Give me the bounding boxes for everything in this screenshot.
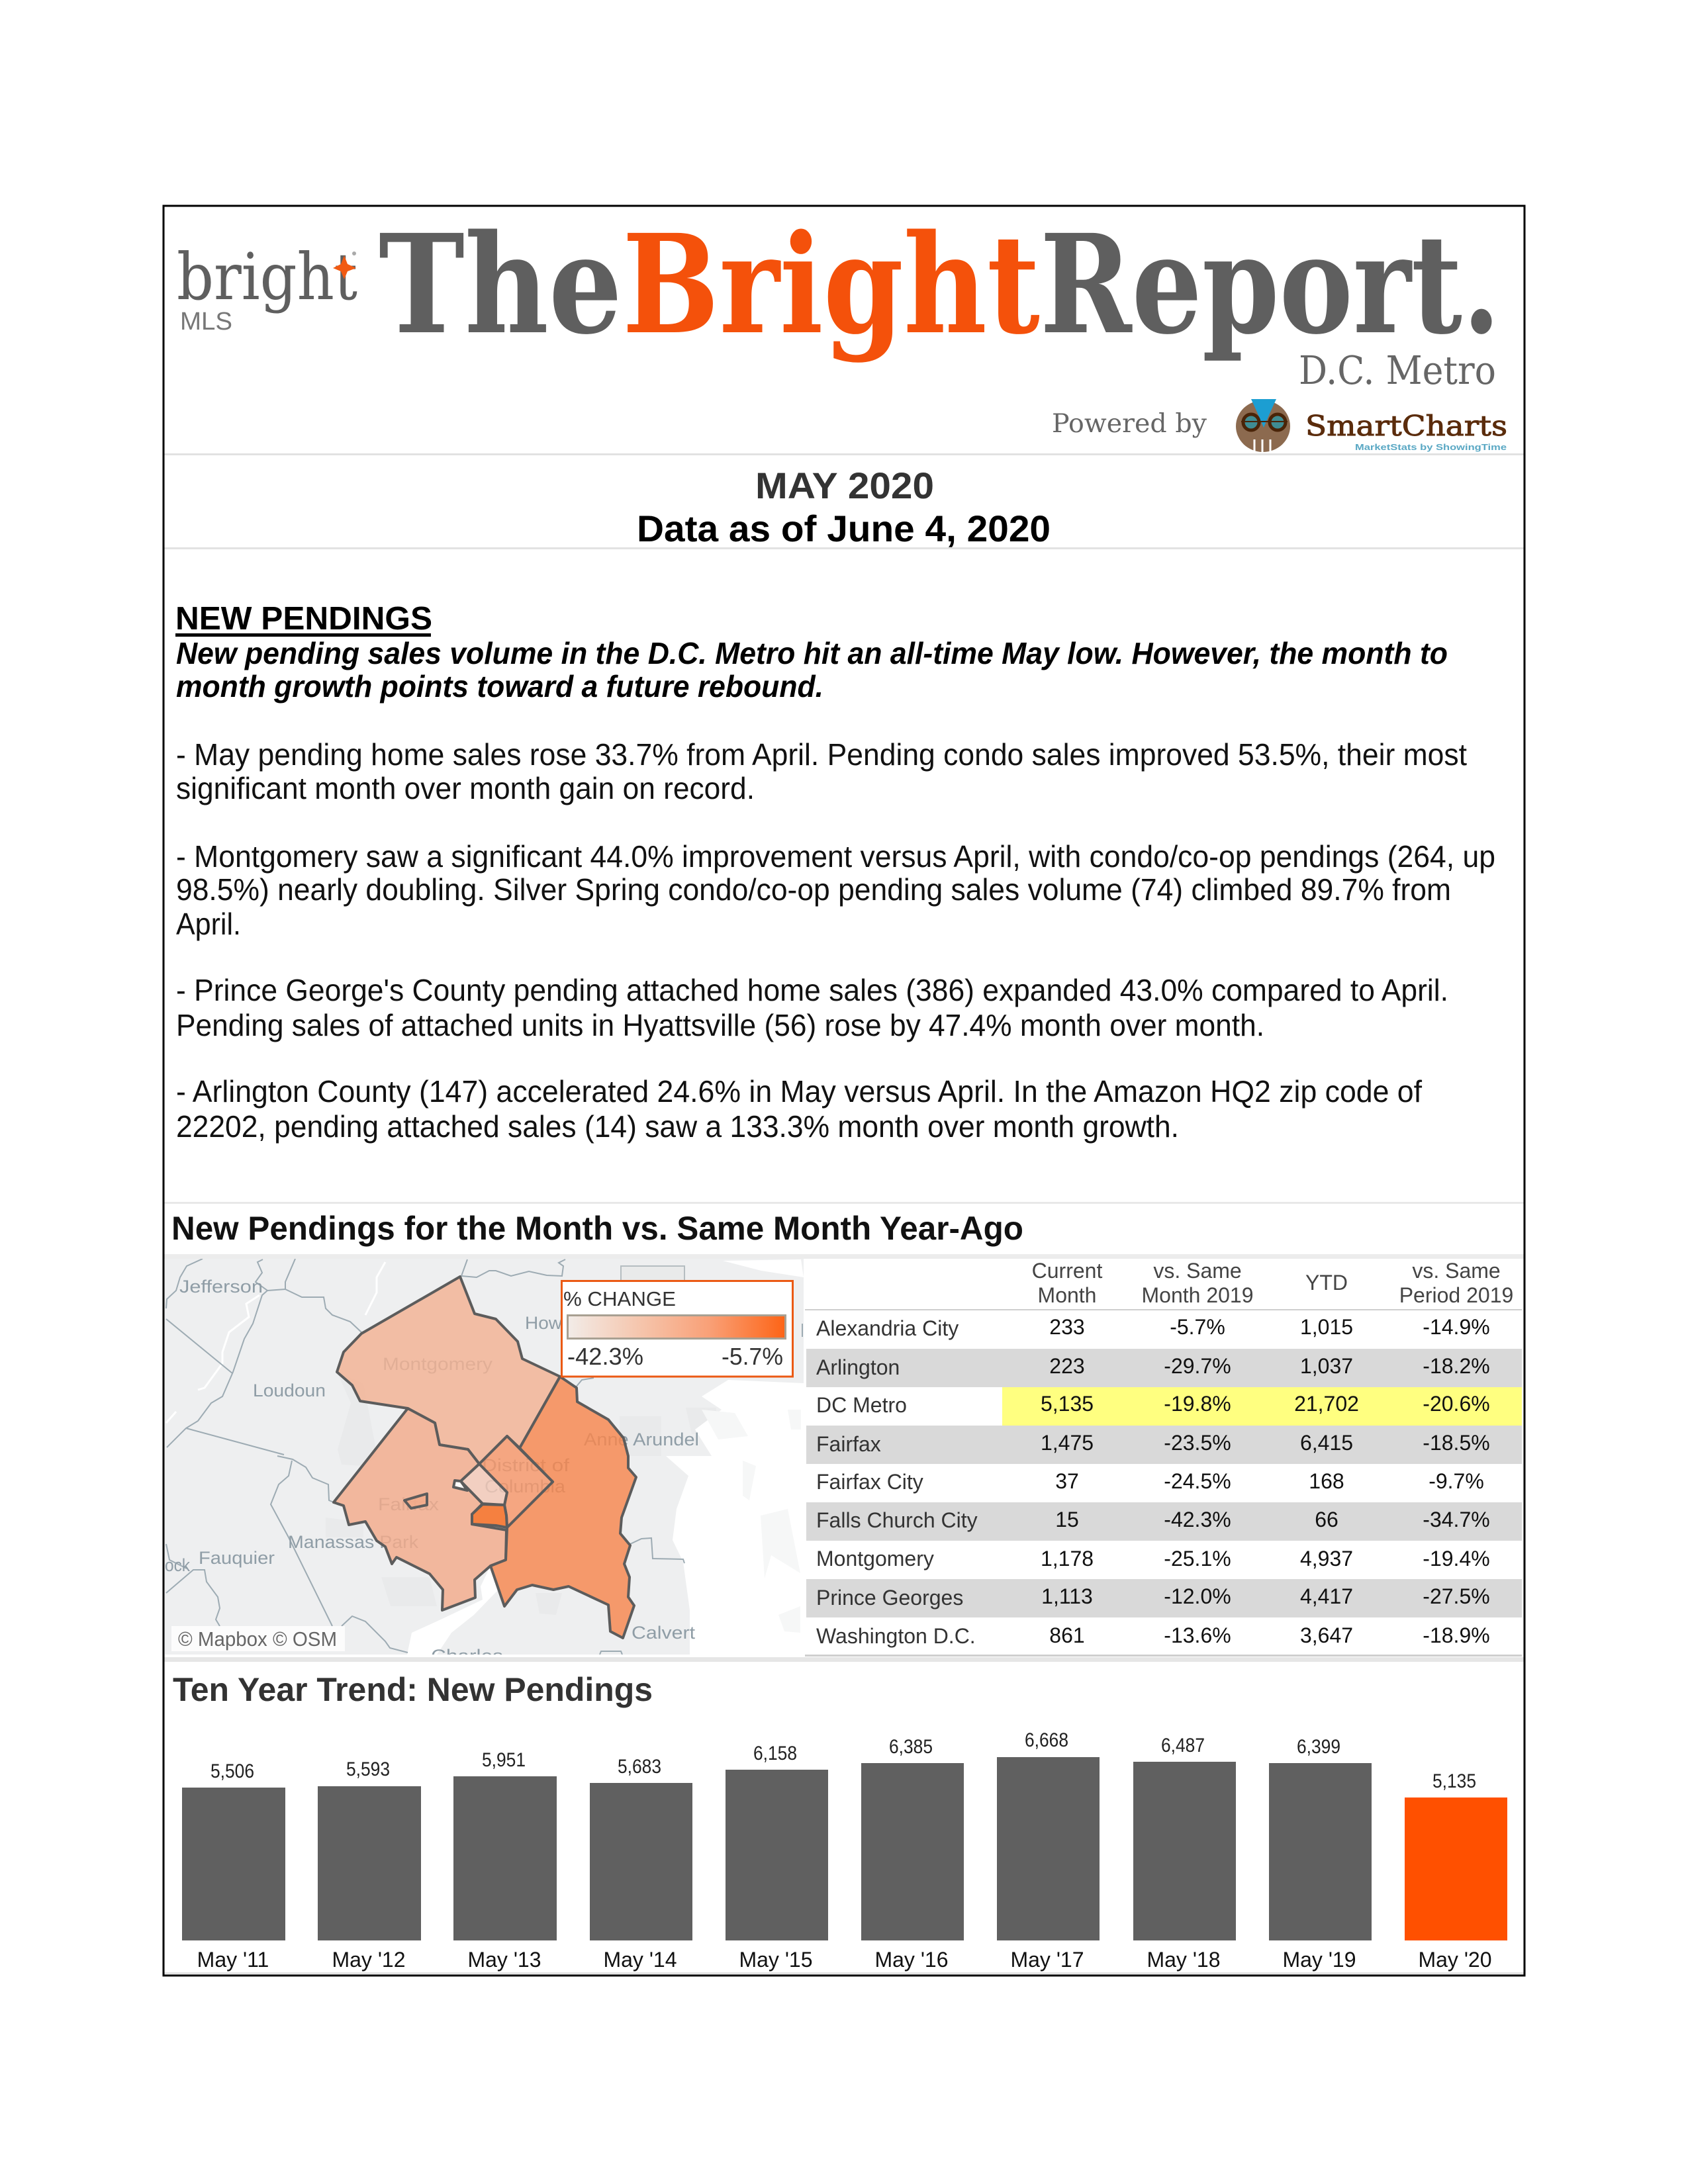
bar May 2015: May '15 <box>739 1948 813 1972</box>
map place labels: ock <box>165 1555 190 1575</box>
map place labels: Calvert <box>632 1623 696 1643</box>
bar chart: ten year trend <box>182 1729 1507 1972</box>
row: Arlington <box>816 1354 1490 1379</box>
text block: paragraph 3: - Prince George's County pending attached home sales (386) expanded 43.0% compared to April. <box>176 973 1448 1007</box>
row: Alexandria City <box>816 1315 1490 1340</box>
row: Fairfax City: 37 <box>1055 1469 1079 1493</box>
logo title: The Bright Report <box>379 205 1501 365</box>
text block: paragraph 4: 22202, pending attached sales (14) saw a 133.3% month over month growth. <box>176 1109 1179 1144</box>
logo: Bright MLS: bright <box>177 240 357 314</box>
table header: Current <box>1032 1259 1102 1283</box>
row: Washington D.C.: -13.6% <box>1164 1623 1231 1647</box>
row: Fairfax: 1,475 <box>1041 1431 1094 1455</box>
map place labels: Fauquier <box>199 1548 275 1568</box>
row: Prince Georges: Prince Georges <box>816 1586 963 1610</box>
row: Fairfax: -23.5% <box>1164 1431 1231 1455</box>
row: Prince Georges: -27.5% <box>1423 1584 1490 1608</box>
bar May 2015 <box>726 1743 828 1972</box>
map place labels: How <box>525 1313 563 1333</box>
row: Montgomery: 1,178 <box>1041 1547 1094 1570</box>
heading: map and table section: New Pendings for the Month vs. Same Month Year-Ago <box>171 1210 1023 1247</box>
table header: YTD <box>1305 1271 1348 1295</box>
text block: paragraph 2: 98.5%) nearly doubling. Silver Spring condo/co-op pending sales volume (74) climbed 89.7% from <box>176 872 1451 907</box>
row: Prince Georges: 1,113 <box>1041 1584 1093 1608</box>
county: Montgomery <box>337 1277 560 1464</box>
map attribution: © Mapbox © OSM <box>178 1627 337 1651</box>
county: Fairfax City <box>404 1494 427 1508</box>
row: Arlington: 1,037 <box>1300 1354 1353 1378</box>
row: Washington D.C.: 861 <box>1049 1623 1085 1647</box>
map place labels: Columbia <box>485 1477 566 1496</box>
logo title: The Bright Report: Report. <box>1040 205 1501 365</box>
text block: paragraph 3: Pending sales of attached units in Hyattsville (56) rose by 47.4% month over month. <box>176 1008 1264 1042</box>
row: Montgomery: Montgomery <box>816 1547 934 1570</box>
row: Washington D.C.: Washington D.C. <box>816 1624 976 1648</box>
county: Washington D.C. <box>479 1436 553 1527</box>
legend: percent change: % CHANGE <box>563 1287 676 1310</box>
icon: SmartCharts owl <box>1236 399 1290 453</box>
row: DC Metro <box>816 1392 1490 1417</box>
lead text: New pending sales volume in the D.C. Metro hit an all-time May low. However, the month to <box>176 636 1448 670</box>
text block: paragraph 3 <box>176 973 1448 1042</box>
row: Arlington: Arlington <box>816 1355 900 1379</box>
row: Arlington: -29.7% <box>1164 1354 1231 1378</box>
logo: Bright MLS: MLS <box>180 308 232 336</box>
text block: paragraph 1: significant month over month gain on record. <box>176 771 755 805</box>
logo title: The Bright Report: Bright <box>622 205 1040 365</box>
row: Fairfax City: Fairfax City <box>816 1470 923 1494</box>
row: Washington D.C.: -18.9% <box>1423 1623 1490 1647</box>
legend: percent change <box>561 1281 793 1377</box>
row: Fairfax City <box>816 1469 1484 1494</box>
bar May 2020: 5,135 <box>1432 1770 1476 1792</box>
row: Alexandria City: -14.9% <box>1423 1315 1490 1339</box>
bar May 2014: May '14 <box>603 1948 677 1972</box>
bar May 2018 <box>1133 1735 1236 1972</box>
bar May 2017 <box>997 1729 1100 1972</box>
row: Montgomery <box>816 1547 1490 1570</box>
map place labels: Loudoun <box>253 1381 326 1400</box>
text block: paragraph 2 <box>176 839 1495 941</box>
text block: paragraph 1 <box>176 737 1467 805</box>
bar May 2016: May '16 <box>874 1948 949 1972</box>
map place labels: District of <box>482 1455 570 1475</box>
bar May 2019: 6,399 <box>1297 1736 1340 1758</box>
bar May 2013: May '13 <box>467 1948 541 1972</box>
table header: vs. Same <box>1412 1259 1501 1283</box>
row: Falls Church City: Falls Church City <box>816 1508 978 1532</box>
row: DC Metro: 5,135 <box>1041 1392 1094 1416</box>
row: Fairfax: Fairfax <box>816 1432 881 1456</box>
row: DC Metro: -19.8% <box>1164 1392 1231 1416</box>
row: Fairfax <box>816 1431 1490 1456</box>
row: Falls Church City: -34.7% <box>1423 1508 1490 1531</box>
legend: percent change: -42.3% <box>567 1343 643 1370</box>
table header <box>1032 1259 1513 1307</box>
bar May 2011 <box>182 1760 285 1972</box>
map place labels: Anne Arundel <box>584 1430 699 1449</box>
row: DC Metro: 21,702 <box>1294 1392 1359 1416</box>
table row shading <box>806 1349 1522 1617</box>
bar May 2016 <box>861 1736 964 1972</box>
row: Prince Georges <box>816 1584 1490 1610</box>
row: Washington D.C.: 3,647 <box>1300 1623 1353 1647</box>
bar May 2019 <box>1269 1736 1372 1972</box>
logo title: The Bright Report: The <box>379 205 622 365</box>
row: Falls Church City: 15 <box>1055 1508 1079 1531</box>
row: Falls Church City: -42.3% <box>1164 1508 1231 1531</box>
date banner <box>164 453 1524 549</box>
row: DC Metro: DC Metro <box>816 1393 907 1417</box>
county boundary lines <box>166 1259 802 1655</box>
lead text: month growth points toward a future rebound. <box>176 669 823 704</box>
row: DC Metro: -20.6% <box>1423 1392 1490 1416</box>
row: Alexandria City: -5.7% <box>1170 1315 1225 1339</box>
county: Alexandria <box>472 1504 507 1527</box>
bar May 2020 <box>1405 1770 1507 1972</box>
bar May 2012: May '12 <box>332 1948 406 1972</box>
map place labels: Manassas Park <box>288 1532 419 1552</box>
bar May 2018: 6,487 <box>1161 1735 1205 1756</box>
row: Fairfax City: 168 <box>1309 1469 1344 1493</box>
panel: choropleth map <box>165 1259 804 1666</box>
map place labels: Montgomery <box>383 1354 493 1374</box>
heading: ten year trend: Ten Year Trend: New Pendings <box>173 1671 653 1708</box>
bar May 2020: May '20 <box>1418 1948 1492 1972</box>
bar May 2012 <box>318 1758 421 1972</box>
row: Arlington: 223 <box>1049 1354 1085 1378</box>
row: Alexandria City: 233 <box>1049 1315 1085 1339</box>
water areas <box>666 1259 804 1655</box>
table header: Period 2019 <box>1399 1283 1513 1307</box>
map place labels: Jefferson <box>179 1277 263 1297</box>
bar May 2015: 6,158 <box>753 1743 797 1764</box>
county polygons <box>334 1277 636 1638</box>
bar May 2014: 5,683 <box>618 1756 661 1778</box>
row: Fairfax: 6,415 <box>1300 1431 1353 1455</box>
row: Arlington: -18.2% <box>1423 1354 1490 1378</box>
bar May 2017: May '17 <box>1010 1948 1084 1972</box>
row: Prince Georges: -12.0% <box>1164 1584 1231 1608</box>
county: Prince Georges <box>491 1377 636 1638</box>
bar May 2013 <box>453 1749 557 1972</box>
powered by label: Powered by <box>1052 409 1207 439</box>
heading: new pendings: NEW PENDINGS <box>175 601 432 637</box>
row: Prince Georges: 4,417 <box>1300 1584 1353 1608</box>
row: Fairfax: -18.5% <box>1423 1431 1490 1455</box>
row: Alexandria City: Alexandria City <box>816 1316 959 1340</box>
text block: paragraph 2: April. <box>176 907 241 941</box>
text block: paragraph 4 <box>176 1074 1422 1144</box>
map place labels: Charles <box>431 1646 503 1666</box>
row: Fairfax City: -24.5% <box>1164 1469 1231 1493</box>
lead text <box>176 636 1448 704</box>
date banner: MAY 2020 <box>755 465 934 506</box>
bar May 2014 <box>590 1756 692 1972</box>
row: Montgomery: -25.1% <box>1164 1547 1231 1570</box>
logo: SmartCharts: SmartCharts <box>1305 410 1507 442</box>
logo: SmartCharts <box>1305 410 1507 452</box>
page frame <box>164 206 1524 1976</box>
bar May 2016: 6,385 <box>889 1736 933 1758</box>
bar May 2017: 6,668 <box>1025 1729 1068 1751</box>
county: Falls Church <box>453 1480 467 1490</box>
map place labels <box>165 1277 699 1666</box>
table header: Month <box>1038 1283 1096 1307</box>
table header: Month 2019 <box>1141 1283 1254 1307</box>
text block: paragraph 2: - Montgomery saw a significant 44.0% improvement versus April, with condo/co-op pendings (264, up <box>176 839 1495 874</box>
county: Arlington <box>461 1464 507 1505</box>
bar May 2013: 5,951 <box>482 1749 526 1771</box>
subtitle: D.C. Metro: D.C. Metro <box>1299 347 1496 393</box>
row: Falls Church City: 66 <box>1315 1508 1338 1531</box>
row: Washington D.C. <box>816 1623 1490 1648</box>
bar May 2012: 5,593 <box>346 1758 390 1780</box>
date banner: Data as of June 4, 2020 <box>637 508 1051 549</box>
table header: vs. Same <box>1153 1259 1242 1283</box>
row: Fairfax City: -9.7% <box>1429 1469 1484 1493</box>
row: Alexandria City: 1,015 <box>1300 1315 1353 1339</box>
bar May 2011: 5,506 <box>211 1760 254 1782</box>
highlighted row <box>1002 1387 1522 1426</box>
row: Montgomery: -19.4% <box>1423 1547 1490 1570</box>
bar May 2019: May '19 <box>1282 1948 1356 1972</box>
row: Falls Church City <box>816 1508 1490 1532</box>
logo: SmartCharts: MarketStats by ShowingTime <box>1355 442 1507 452</box>
legend: percent change: -5.7% <box>722 1343 783 1370</box>
county: Fairfax <box>334 1408 506 1610</box>
bar May 2018: May '18 <box>1147 1948 1221 1972</box>
row: Montgomery: 4,937 <box>1300 1547 1353 1570</box>
text block: paragraph 1: - May pending home sales rose 33.7% from April. Pending condo sales improved 53.5%, their most <box>176 737 1467 772</box>
bar May 2011: May '11 <box>197 1948 269 1972</box>
panel: data table <box>804 1259 1522 1657</box>
map place labels: Fairfax <box>378 1494 440 1514</box>
text block: paragraph 4: - Arlington County (147) accelerated 24.6% in May versus April. In the Amazon HQ2 zip code of <box>176 1074 1422 1109</box>
